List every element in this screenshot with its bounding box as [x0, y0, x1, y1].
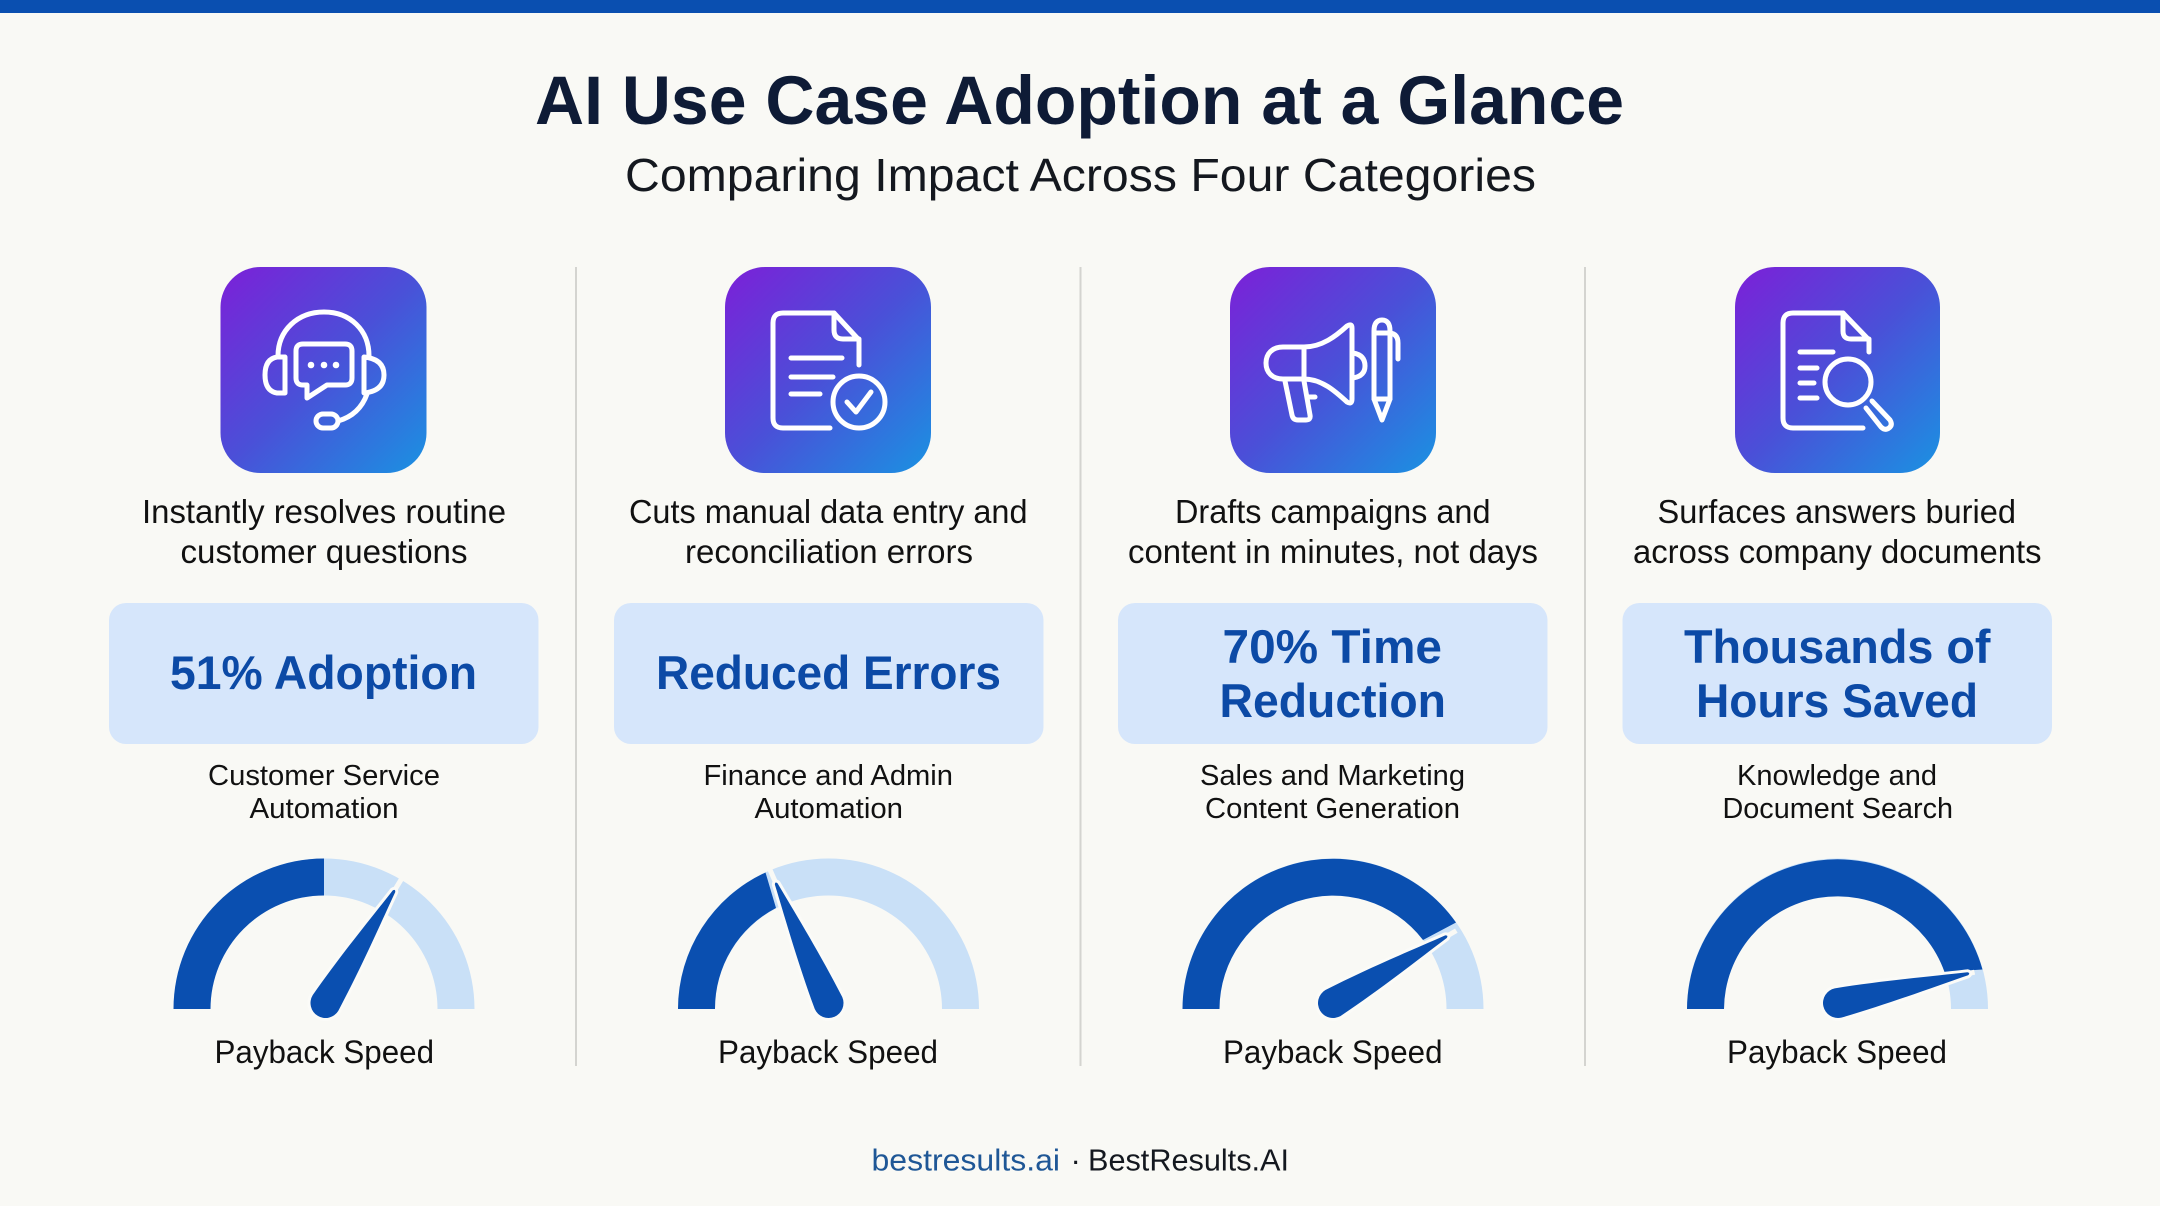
icon: document with check mark	[725, 267, 931, 473]
gauge label: Payback Speed	[1223, 1034, 1442, 1070]
metric card: 51% Adoption: 51% Adoption	[170, 646, 477, 699]
metric card: Thousands of Hours Saved: Thousands of	[1684, 620, 1991, 673]
category label	[704, 760, 953, 825]
metric card: 51% Adoption	[109, 603, 538, 744]
category label: Content Generation	[1205, 793, 1460, 825]
footer: BestResults.AI	[1088, 1142, 1289, 1178]
footer	[872, 1142, 1289, 1178]
footer: ·	[1070, 1142, 1081, 1178]
panel: knowledge and document search	[1622, 267, 2052, 1070]
description: content in minutes, not days	[1128, 533, 1538, 570]
description: Instantly resolves routine	[142, 493, 506, 530]
icon: megaphone and pen	[1230, 267, 1436, 473]
icon: document with magnifying glass	[1735, 267, 1940, 473]
description	[629, 493, 1028, 570]
top accent bar	[0, 0, 2160, 13]
metric card: 70% Time Reduction: 70% Time	[1222, 620, 1442, 673]
gauge label: Payback Speed	[214, 1034, 434, 1070]
icon: headset with chat bubble	[220, 267, 426, 473]
gauge label: Payback Speed	[718, 1034, 938, 1070]
description: Drafts campaigns and	[1175, 493, 1490, 530]
category label: Knowledge and	[1737, 760, 1937, 792]
description: across company documents	[1633, 533, 2042, 570]
metric card: 70% Time Reduction	[1118, 603, 1548, 744]
title: AI Use Case Adoption at a Glance	[535, 62, 1624, 139]
gauge: payback speed, needle far right	[1687, 858, 1988, 1021]
gauge label: Payback Speed	[1727, 1034, 1947, 1070]
category label: Document Search	[1722, 793, 1953, 825]
panel: sales and marketing content generation	[1118, 267, 1548, 1070]
category label: Customer Service	[208, 760, 440, 792]
category label	[1200, 760, 1465, 825]
category label: Automation	[754, 793, 903, 825]
category label	[208, 760, 440, 825]
description	[142, 493, 506, 570]
metric card: Reduced Errors: Reduced Errors	[656, 646, 1001, 699]
description	[1633, 493, 2042, 570]
metric card: 70% Time Reduction: Reduction	[1220, 674, 1446, 727]
gauge: payback speed, needle right	[1182, 858, 1484, 1024]
description: Surfaces answers buried	[1658, 493, 2016, 530]
metric card: Thousands of Hours Saved: Hours Saved	[1696, 674, 1978, 727]
gauge: payback speed, needle upper right	[174, 858, 474, 1024]
description: customer questions	[180, 533, 468, 570]
description	[1128, 493, 1538, 570]
metric card: Thousands of Hours Saved	[1622, 603, 2052, 744]
panel: customer service automation	[109, 267, 538, 1070]
category label	[1722, 760, 1953, 825]
description: Cuts manual data entry and	[629, 493, 1028, 530]
panel: finance and admin automation	[614, 267, 1044, 1070]
subtitle: Comparing Impact Across Four Categories	[625, 149, 1536, 201]
description: reconciliation errors	[685, 533, 973, 570]
footer: bestresults.ai	[872, 1142, 1060, 1178]
metric card: Reduced Errors	[614, 603, 1044, 744]
category label: Automation	[250, 793, 398, 825]
category label: Finance and Admin	[704, 760, 953, 792]
gauge: payback speed, needle upper left	[678, 858, 979, 1023]
category label: Sales and Marketing	[1200, 760, 1465, 792]
